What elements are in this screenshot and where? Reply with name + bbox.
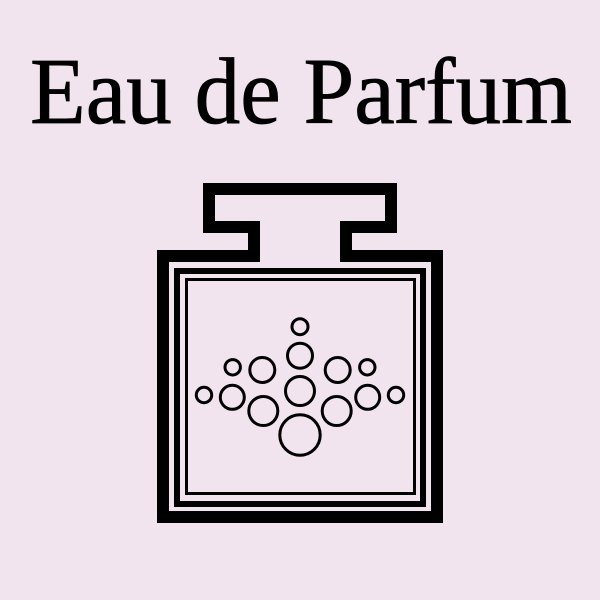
icon: perfume bottle	[163, 189, 437, 517]
label frame	[177, 271, 423, 504]
title: Eau de Parfum	[30, 40, 572, 144]
bottle outline with cap	[163, 189, 437, 517]
bubbles pattern	[196, 319, 404, 455]
